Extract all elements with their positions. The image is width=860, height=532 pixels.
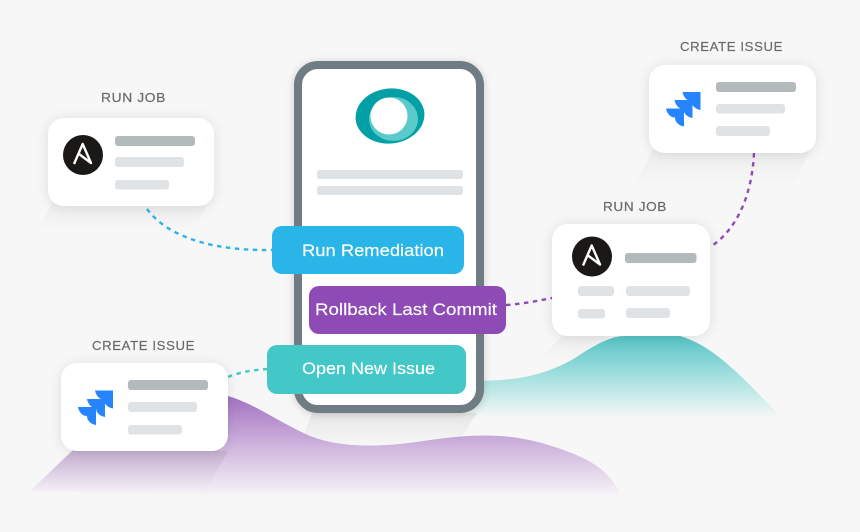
phone bbox=[298, 65, 480, 409]
panel: run job left bbox=[48, 90, 214, 206]
icon: jira bbox=[666, 92, 700, 126]
teal hill bbox=[470, 336, 782, 418]
dashed connector: run remediation to run job bbox=[147, 209, 272, 250]
text placeholders bbox=[128, 380, 208, 434]
card bbox=[649, 65, 816, 153]
button: run remediation bbox=[272, 226, 464, 274]
heading: CREATE ISSUE bbox=[92, 338, 195, 353]
button: rollback last commit bbox=[309, 286, 506, 334]
card bbox=[61, 363, 228, 451]
button: run remediation: Run Remediation bbox=[302, 241, 444, 260]
text placeholders bbox=[578, 253, 696, 318]
panel: create issue top right bbox=[649, 39, 816, 153]
phone body bbox=[298, 65, 480, 409]
card cast shadows bbox=[30, 150, 810, 491]
phone text placeholders bbox=[317, 170, 463, 195]
logo bbox=[353, 85, 427, 147]
button: rollback last commit: Rollback Last Commit bbox=[315, 300, 497, 319]
button: open new issue bbox=[267, 345, 466, 394]
heading: RUN JOB bbox=[101, 90, 166, 105]
panel: run job right bbox=[552, 199, 710, 336]
card bbox=[552, 224, 710, 336]
heading: RUN JOB bbox=[603, 199, 667, 214]
dashed connector: open issue to create issue bbox=[228, 369, 267, 377]
dashed connector: run job to create issue bbox=[710, 153, 754, 247]
icon: ansible bbox=[572, 236, 612, 276]
heading: CREATE ISSUE bbox=[680, 39, 783, 54]
icon: jira bbox=[78, 390, 113, 425]
icon: ansible bbox=[63, 135, 103, 175]
panel: create issue bottom left bbox=[61, 338, 228, 451]
button: open new issue: Open New Issue bbox=[302, 359, 435, 378]
text placeholders bbox=[716, 82, 796, 136]
purple hill bbox=[30, 396, 620, 495]
card bbox=[48, 118, 214, 206]
dashed connector: rollback to run job bbox=[506, 298, 552, 305]
text placeholders bbox=[115, 136, 195, 190]
